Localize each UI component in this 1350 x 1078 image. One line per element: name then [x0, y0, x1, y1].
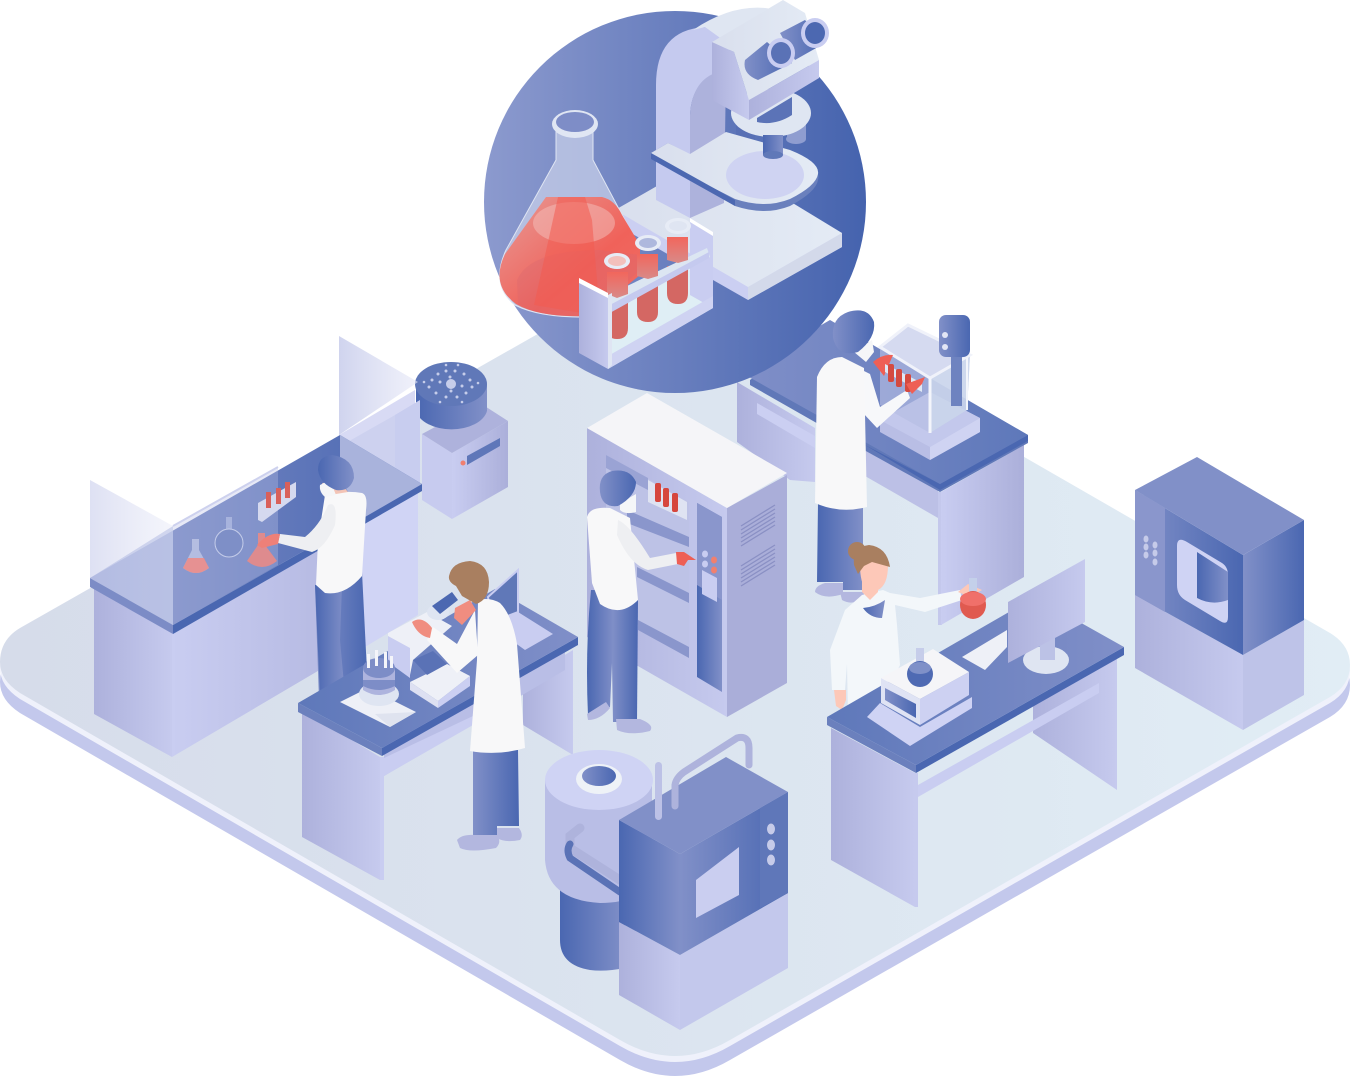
platform floor [0, 256, 1350, 1076]
balance with blue flask [867, 648, 972, 746]
glass stirrer instrument on back bench [880, 315, 980, 460]
microscope [615, 0, 842, 300]
erlenmeyer flask with red liquid [500, 110, 640, 317]
centrifuge machine [415, 362, 508, 519]
magnified circle callout [484, 0, 866, 393]
back right bench [737, 320, 1028, 625]
tank upper body [545, 780, 652, 903]
glass screens [90, 480, 173, 625]
tube rack in cabinet [648, 480, 687, 520]
red flask [958, 578, 986, 619]
handle and pipe [675, 737, 749, 806]
arm and coat [862, 370, 910, 428]
scientist at left bench [257, 455, 367, 700]
front furnace with tank [545, 737, 788, 1030]
scientist at microscope [412, 561, 525, 850]
right side oven cabinet [1135, 457, 1304, 730]
monitor [1040, 630, 1055, 660]
right bench top and computer [827, 559, 1124, 773]
furnace lower [619, 922, 680, 1030]
test tube rack [579, 218, 713, 369]
head [854, 340, 874, 362]
back glass panel [339, 336, 418, 435]
tall storage cabinet [587, 393, 787, 717]
tank lower cylinder [560, 890, 625, 971]
vents [741, 505, 775, 586]
bench microscope and balance [340, 592, 470, 727]
laptop on front bench [488, 570, 553, 650]
pants [817, 503, 863, 590]
gloves and tubes [873, 355, 893, 376]
right bench legs [831, 657, 1117, 907]
scientist at cabinet [587, 470, 696, 733]
front bench [298, 589, 578, 880]
tank pipes [570, 828, 620, 880]
long left bench with glass screens [90, 336, 422, 757]
furnace upper [619, 820, 680, 955]
woman scientist holding flask [830, 542, 986, 715]
flasks on bench [183, 482, 296, 573]
keyboard [962, 630, 1007, 670]
scientist at glass instrument [815, 310, 925, 603]
